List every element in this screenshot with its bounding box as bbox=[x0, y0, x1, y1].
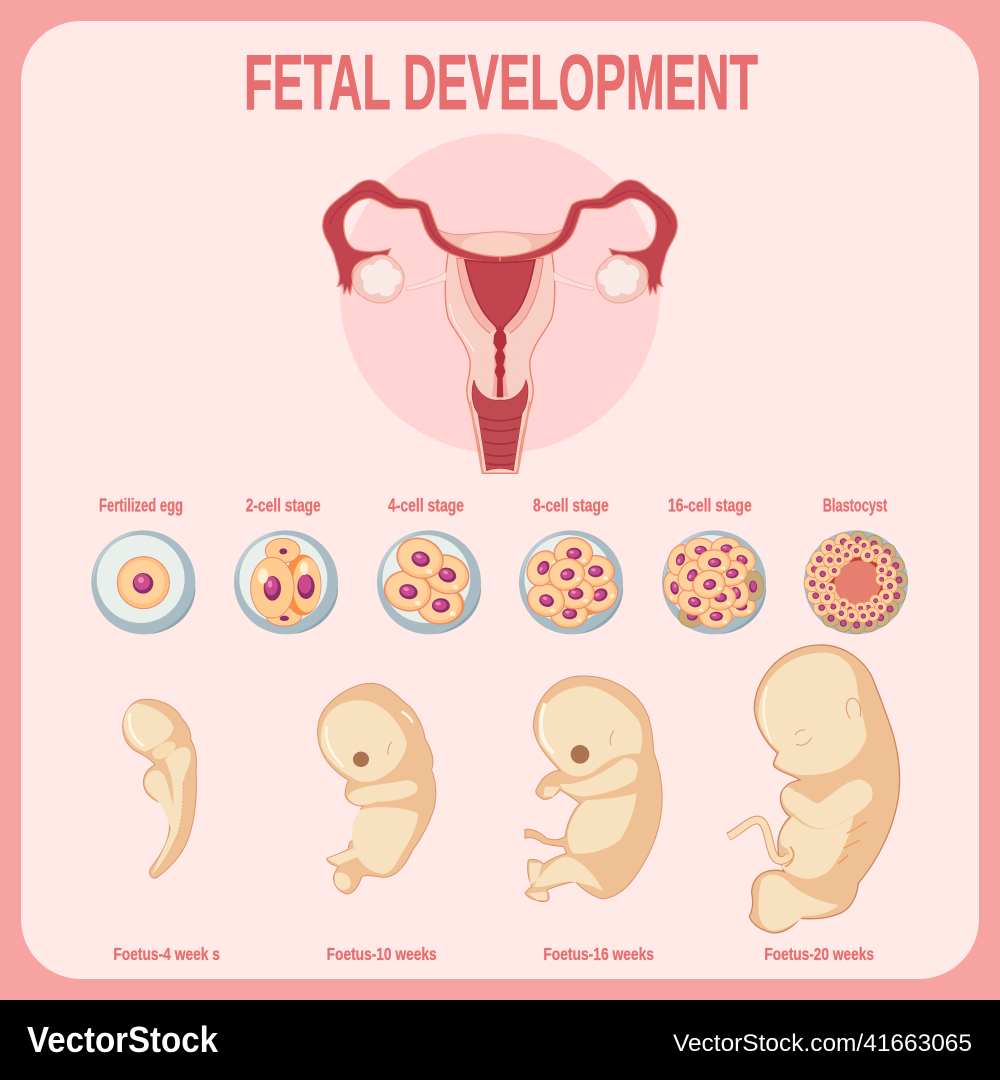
uterus inner layers bbox=[457, 258, 543, 340]
cell: 2-cell stage bbox=[234, 530, 338, 634]
cervical canal bbox=[493, 325, 507, 397]
label: blastocyst: Blastocyst bbox=[823, 496, 887, 516]
vaginal folds bbox=[479, 417, 521, 465]
cell: 8-cell stage bbox=[519, 530, 624, 634]
uterus outer wall bbox=[445, 252, 555, 473]
cell: blastocyst bbox=[804, 530, 908, 634]
uterine highlight bbox=[450, 303, 474, 352]
label: 16-cell: 16-cell stage bbox=[668, 496, 752, 516]
fetus: 16 weeks bbox=[525, 676, 662, 902]
fetus: 20 weeks bbox=[728, 645, 899, 933]
illustration: uterus bbox=[323, 180, 677, 473]
fetuses 4 and 10 weeks bbox=[113, 683, 437, 964]
watermark left: VectorStock bbox=[27, 1019, 219, 1060]
label: 4-cell: 4-cell stage bbox=[388, 496, 464, 516]
backdrop circle bbox=[340, 134, 660, 454]
fetus: 10 weeks bbox=[318, 683, 436, 894]
label: 16 weeks: Foetus-16 weeks bbox=[543, 944, 654, 964]
watermark right: VectorStock.com/41663065 bbox=[673, 1030, 972, 1057]
watermark bar bbox=[0, 1000, 1000, 1080]
label: 10 weeks: Foetus-10 weeks bbox=[327, 944, 437, 964]
vaginal side walls bbox=[470, 402, 530, 473]
label: 8-cell: 8-cell stage bbox=[533, 496, 609, 516]
left tube and ovary bbox=[323, 180, 500, 303]
uterine cavity bbox=[465, 260, 535, 338]
label: 4 weeks: Foetus-4 week s bbox=[113, 944, 220, 964]
label: 20 weeks: Foetus-20 weeks bbox=[764, 944, 874, 964]
umbilical cord bbox=[728, 820, 789, 861]
label: fertilized egg: Fertilized egg bbox=[99, 496, 183, 516]
cell: fertilized egg bbox=[91, 530, 195, 634]
fetus: 4 weeks bbox=[123, 699, 196, 878]
cell: 16-cell stage bbox=[661, 530, 766, 634]
fetuses 16 and 20 weeks bbox=[525, 645, 899, 964]
cervix wall bbox=[479, 330, 521, 400]
label: 2-cell: 2-cell stage bbox=[246, 496, 321, 516]
cell: 4-cell stage bbox=[377, 530, 481, 634]
cell stages right bbox=[519, 530, 908, 634]
fundus bbox=[437, 228, 563, 258]
vagina bbox=[472, 380, 528, 471]
right tube and ovary bbox=[500, 180, 677, 303]
cell stages left bbox=[91, 530, 481, 634]
